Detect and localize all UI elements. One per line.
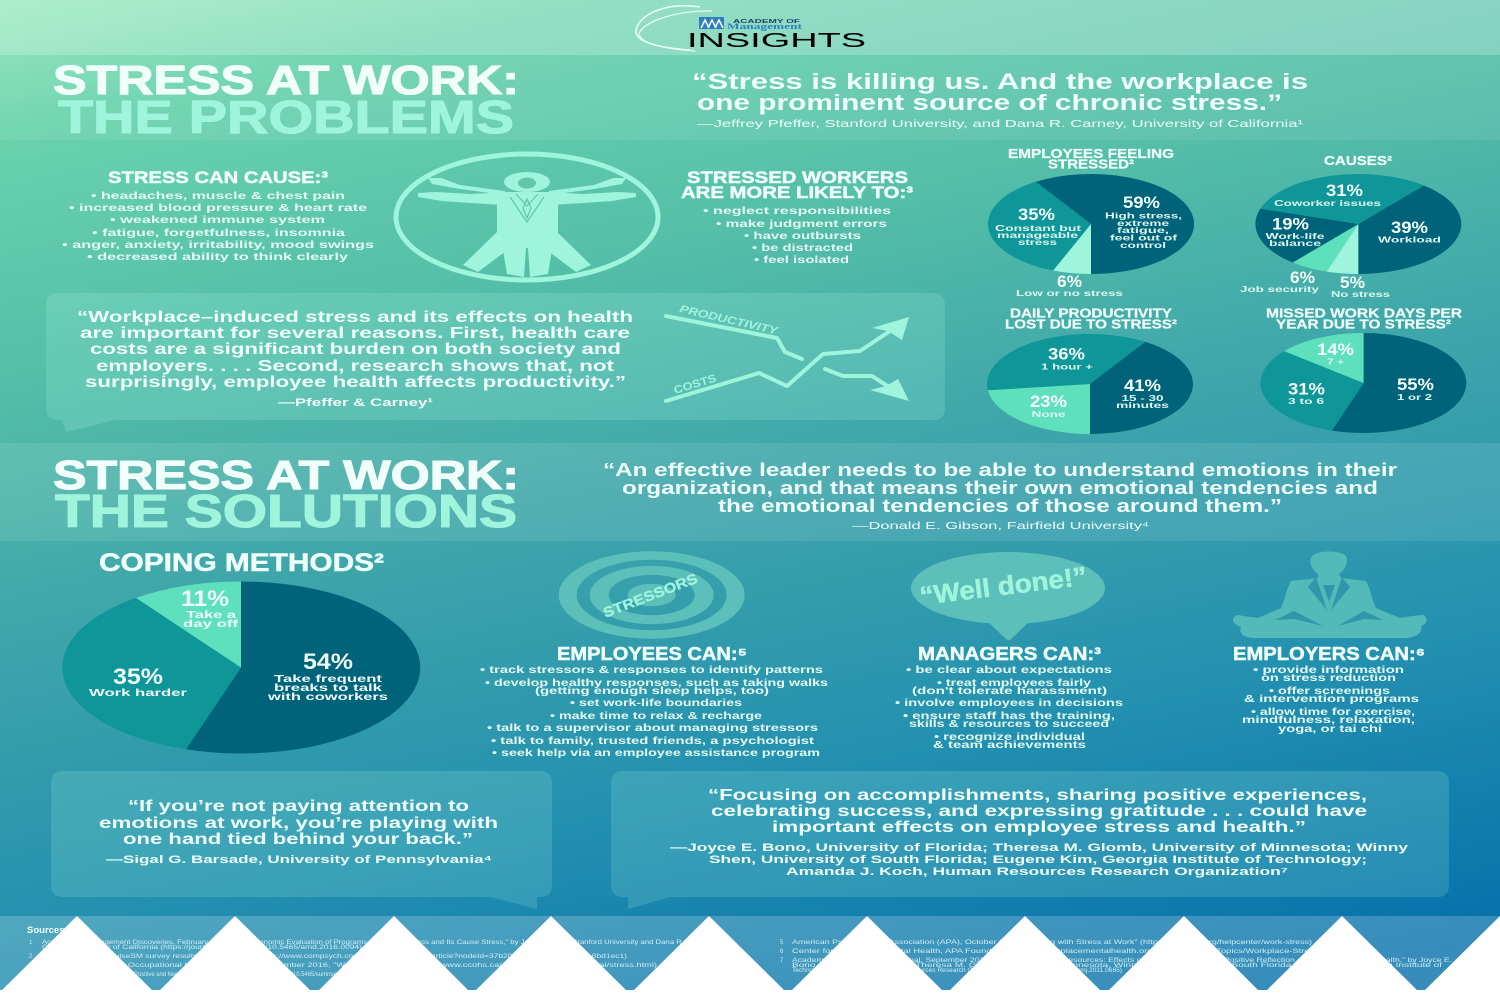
text block: employees can xyxy=(480,644,829,759)
panel: sources: Bono, University of Florida, Theresa M. Glomb, University of Minnesota, Winny Shen, University of South Florida, Eugene Kim, Georgia Institute of xyxy=(792,963,1443,969)
pie chart: employees feeling stressed: extreme xyxy=(1117,219,1170,228)
text block: managers can: & team achievements xyxy=(933,740,1087,751)
callout: workplace-induced stress quote: employers. . . . Second, research shows that, not xyxy=(96,358,615,375)
text block: managers can: • recognize individual xyxy=(934,732,1085,743)
text block: managers can: skills & resources to succeed xyxy=(909,719,1109,730)
callout: Bono et al. quote: important effects on employee stress and health.” xyxy=(772,819,1306,836)
pie chart: causes: No stress xyxy=(1331,290,1391,299)
pie chart: missed work days: MISSED WORK DAYS PER xyxy=(1266,306,1462,320)
pie chart: daily productivity lost xyxy=(987,306,1193,434)
heading: the solutions: STRESS AT WORK: xyxy=(53,452,519,498)
pie chart: daily productivity lost: None xyxy=(1032,410,1066,419)
pie chart: daily productivity lost: 23% xyxy=(1030,392,1067,411)
chart icon: productivity falling, costs rising xyxy=(666,303,909,401)
chart icon: productivity falling, costs rising: COSTS xyxy=(672,373,718,397)
quote: Gibson: “An effective leader needs to be able to understand emotions in their xyxy=(603,459,1397,480)
text block: managers can: • ensure staff has the training, xyxy=(903,711,1115,722)
panel: sources: Academy of Management Insights, Positive and Negative Emotions (https://journals.aom.org/doi/10.5465/summary) xyxy=(42,972,342,978)
callout: Barsade quote: “If you’re not paying attention to xyxy=(128,798,469,815)
panel: sources: Carney, University of California (https://journals.aom.org/doi/10.5465/amd.2016.0094) xyxy=(42,945,362,951)
pie chart: coping methods: Work harder xyxy=(89,688,187,699)
panel: sources: 1 xyxy=(29,940,33,946)
pie chart: daily productivity lost: 36% xyxy=(1048,344,1085,364)
pie chart: missed work days: 55% xyxy=(1397,375,1434,394)
text block: employees can: • develop healthy responses, such as taking walks xyxy=(485,678,829,689)
text block: stress can cause xyxy=(62,168,375,263)
pie chart: employees feeling stressed: 59% xyxy=(1123,193,1160,212)
pie chart: causes: 39% xyxy=(1391,218,1428,237)
pie chart: causes: CAUSES² xyxy=(1324,154,1392,168)
quote: Pfeffer and Carney: “Stress is killing us. And the workplace is xyxy=(692,69,1308,94)
quote: Gibson: organization, and that means their own emotional tendencies and xyxy=(622,477,1378,498)
chart icon: productivity falling, costs rising: PRODUCTIVITY xyxy=(678,303,780,338)
heading: the problems: THE PROBLEMS xyxy=(58,91,514,143)
icon: well done speech bubble xyxy=(911,552,1105,640)
text block: employers can: yoga, or tai chi xyxy=(1278,724,1382,735)
text block: managers can: • be clear about expectations xyxy=(906,665,1113,676)
pie chart: causes: balance xyxy=(1269,239,1322,248)
text block: employees can: • talk to family, trusted friends, a psychologist xyxy=(491,736,815,747)
icon: stressors target: STRESSORS xyxy=(601,570,700,621)
callout: Barsade quote: —Sigal G. Barsade, University of Pennsylvania⁴ xyxy=(106,854,492,866)
icon: stressors target xyxy=(568,556,736,634)
text block: managers can: MANAGERS CAN:³ xyxy=(918,644,1101,664)
text block: managers can: • treat employees fairly xyxy=(937,678,1092,689)
panel: sources: 7 xyxy=(780,958,784,964)
white sawtooth edge at the bottom xyxy=(0,916,1500,1000)
pie chart: coping methods xyxy=(62,549,420,753)
pie chart: employees feeling stressed: Constant but xyxy=(995,224,1082,233)
text block: stressed workers: • make judgment errors xyxy=(716,219,888,230)
pie chart: employees feeling stressed xyxy=(988,147,1194,298)
pie chart: causes: Coworker issues xyxy=(1274,199,1382,208)
pie chart: employees feeling stressed: fatigue, xyxy=(1117,226,1169,235)
heading: the problems: STRESS AT WORK: xyxy=(53,57,519,103)
heading: the solutions xyxy=(53,452,519,537)
pie chart: missed work days: 7 + xyxy=(1327,358,1344,366)
pie chart: employees feeling stressed: High stress, xyxy=(1105,212,1182,220)
pie chart: coping methods: day off xyxy=(183,619,239,630)
logo: Academy of Management Insights: ACADEMY OF xyxy=(733,19,800,25)
text block: employees can: • set work-life boundaries xyxy=(570,698,743,709)
pie chart: coping methods: 35% xyxy=(113,664,163,689)
text block: stressed workers: • neglect responsibilities xyxy=(703,206,892,217)
panel: sources: 6 xyxy=(780,949,784,955)
pie chart: causes: 19% xyxy=(1272,214,1309,234)
panel: sources: 4 xyxy=(29,972,33,978)
text block: employees can: • track stressors & responses to identify patterns xyxy=(480,665,824,676)
logo: Academy of Management Insights: INSIGHTS xyxy=(687,30,866,52)
text block: stressed workers: ARE MORE LIKELY TO:³ xyxy=(681,183,913,202)
text block: stressed workers: STRESSED WORKERS xyxy=(687,168,908,187)
panel: sources: American Psychological Association (APA), October 2018, "Coping with Stress at Work" (http://www.apa.org/helpcenter/work-stress) xyxy=(792,940,1312,946)
text block: employers can: • provide information xyxy=(1253,665,1404,676)
pie chart: coping methods: COPING METHODS² xyxy=(99,549,384,577)
callout: Barsade quote: emotions at work, you’re playing with xyxy=(99,815,498,832)
text block: stressed workers: • feel isolated xyxy=(754,255,849,266)
text block: stress can cause: • anger, anxiety, irritability, mood swings xyxy=(62,240,375,251)
text block: employers can: on stress reduction xyxy=(1261,673,1396,684)
text block: employees can: (getting enough sleep helps, too) xyxy=(535,686,769,697)
pie chart: employees feeling stressed: EMPLOYEES FEELING xyxy=(1008,147,1174,161)
callout: Barsade quote xyxy=(51,771,552,909)
heading: the solutions: THE SOLUTIONS xyxy=(55,485,517,537)
pie chart: employees feeling stressed: 35% xyxy=(1018,205,1055,224)
panel: sources: Canadian Centre for Occupational Health and Safety, December 2016, "Workplace Stress" (http://www.ccohs.ca/oshanswers/psychosocial/stress.html) xyxy=(42,963,657,969)
quote: Gibson: the emotional tendencies of those around them.” xyxy=(718,495,1282,516)
callout: Bono et al. quote: Shen, University of South Florida; Eugene Kim, Georgia Institute of Technology; xyxy=(709,854,1367,866)
text block: employees can: EMPLOYEES CAN:⁵ xyxy=(557,644,747,664)
pie chart: coping methods: 11% xyxy=(181,586,229,611)
quote: Pfeffer and Carney: one prominent source of chronic stress.” xyxy=(697,90,1282,115)
logo: Academy of Management Insights: Management xyxy=(727,22,803,31)
text block: employers can: • offer screenings xyxy=(1269,686,1391,697)
callout: workplace-induced stress quote: surprisingly, employee health affects productivity.” xyxy=(85,374,626,391)
text block: employees can: • make time to relax & recharge xyxy=(550,711,763,722)
callout: Bono et al. quote xyxy=(611,771,1449,909)
text block: employers can: mindfulness, relaxation, xyxy=(1242,715,1415,726)
pie chart: causes: Workload xyxy=(1378,236,1441,244)
pie chart: employees feeling stressed: 6% xyxy=(1057,272,1082,291)
pie chart: daily productivity lost: DAILY PRODUCTIVITY xyxy=(1010,306,1173,320)
panel: sources: Academy of Management Discoveries, February 2018, "The Economic Evaluation of Programs to Reduce Stress and Its Cause Stress," by Jeffrey Pfeffer, Stanford University and Dana R. xyxy=(42,940,684,946)
text block: stressed workers: • have outbursts xyxy=(744,231,862,242)
pie chart: daily productivity lost: 1 hour + xyxy=(1041,362,1094,372)
text block: employers can: & intervention programs xyxy=(1244,694,1420,705)
callout: Bono et al. quote: Amanda J. Koch, Human Resources Research Organization⁷ xyxy=(786,866,1289,878)
text block: stress can cause: • decreased ability to think clearly xyxy=(87,252,349,263)
pie chart: missed work days: 14% xyxy=(1317,340,1354,359)
pie chart: daily productivity lost: 41% xyxy=(1124,376,1161,395)
pie chart: daily productivity lost: LOST DUE TO STRESS² xyxy=(1005,318,1177,332)
text block: managers can: (don't tolerate harassment) xyxy=(912,686,1107,697)
panel: sources: Center for Workplace Mental Health, APA Foundation (http://workplacementalhealth.org/Mental-Health-Topics/Workplace-Stress) xyxy=(792,949,1322,955)
pie chart: employees feeling stressed: control xyxy=(1120,241,1166,250)
pie chart: missed work days: 1 or 2 xyxy=(1397,393,1433,402)
pie chart: coping methods: Take frequent xyxy=(274,674,383,685)
text block: managers can xyxy=(895,644,1124,751)
pie chart: causes: Work-life xyxy=(1266,232,1325,241)
text block: employers can: • allow time for exercise, xyxy=(1251,707,1415,718)
pie chart: coping methods: 54% xyxy=(303,649,353,674)
callout: workplace-induced stress quote: “Workplace–induced stress and its effects on health xyxy=(77,309,633,326)
text block: stress can cause: • headaches, muscle & chest pain xyxy=(91,191,345,202)
panel: sources: 5 xyxy=(780,940,784,946)
callout: Bono et al. quote: celebrating success, and expressing gratitude . . . could have xyxy=(711,803,1367,820)
callout: workplace-induced stress quote: —Pfeffer & Carney¹ xyxy=(278,397,434,409)
pie chart: causes xyxy=(1240,154,1461,299)
logo: Academy of Management Insights xyxy=(636,6,866,52)
callout: workplace-induced stress quote xyxy=(46,293,945,432)
text block: employees can: • talk to a supervisor about managing stressors xyxy=(487,723,819,734)
panel: sources: Sources xyxy=(27,925,64,936)
panel: sources xyxy=(0,916,1500,1000)
callout: Bono et al. quote: “Focusing on accomplishments, sharing positive experiences, xyxy=(708,787,1367,804)
pie chart: missed work days: YEAR DUE TO STRESS² xyxy=(1276,318,1451,332)
icon: well done speech bubble: “Well done!” xyxy=(918,561,1088,611)
text block: employers can xyxy=(1233,644,1425,735)
text block: employees can: • seek help via an employee assistance program xyxy=(492,748,820,759)
panel: sources: Technology; Amanda J. Koch, Human Resources Research Organization (https://doi.org/10.5465/amj.2011.0665) xyxy=(792,968,1122,974)
text block: employers can: EMPLOYERS CAN:⁶ xyxy=(1233,644,1425,664)
text block: stressed workers: • be distracted xyxy=(752,243,853,254)
pie chart: employees feeling stressed: manageable xyxy=(997,231,1079,240)
callout: workplace-induced stress quote: costs are a significant burden on both society and xyxy=(90,341,621,358)
text block: stress can cause: • fatigue, forgetfulness, insomnia xyxy=(92,228,346,239)
panel: sources: ComPsych StressPulseSM survey results, October 2017 (https://www.compsych.com/press-room/press-article?nodeId=37b20f13-6b07-4e2a-9d2e-8bd1ec1) xyxy=(42,954,627,960)
pie chart: causes: 5% xyxy=(1340,273,1365,292)
callout: workplace-induced stress quote: are important for several reasons. First, health care xyxy=(80,325,630,342)
pie chart: coping methods: with coworkers xyxy=(266,692,389,703)
pie chart: missed work days: 31% xyxy=(1288,380,1325,398)
pie chart: causes: 6% xyxy=(1290,268,1315,287)
quote: Gibson xyxy=(603,459,1397,532)
icon: meditating employer xyxy=(1233,552,1427,638)
pie chart: coping methods: breaks to talk xyxy=(274,683,383,694)
text block: managers can: • involve employees in decisions xyxy=(895,698,1124,709)
quote: Pfeffer and Carney xyxy=(692,69,1308,130)
panel: sources: Academy of Management Journal, September 2013, "Building Positive Resources: Effects of Positive Events and Positive Reflection on Work Stress and Health," by Joyce E. xyxy=(792,958,1452,964)
pie chart: causes: Job security xyxy=(1240,285,1320,294)
text block: stress can cause: • weakened immune system xyxy=(110,215,325,226)
callout: Barsade quote: one hand tied behind your back.” xyxy=(123,831,473,848)
text block: stress can cause: STRESS CAN CAUSE:³ xyxy=(108,168,328,187)
pie chart: daily productivity lost: minutes xyxy=(1116,401,1170,410)
pie chart: employees feeling stressed: feel out of xyxy=(1110,234,1178,242)
text block: stress can cause: • increased blood pressure & heart rate xyxy=(69,203,368,214)
panel: sources: 3 xyxy=(29,963,33,969)
pie chart: missed work days xyxy=(1260,306,1466,433)
pie chart: coping methods: Take a xyxy=(186,610,237,621)
quote: Gibson: —Donald E. Gibson, Fairfield University⁴ xyxy=(852,520,1149,532)
text block: stressed workers xyxy=(681,168,913,266)
pie chart: employees feeling stressed: stress xyxy=(1018,238,1058,247)
pie chart: employees feeling stressed: Low or no stress xyxy=(1016,289,1124,298)
panel: sources: 2 xyxy=(29,954,33,960)
icon: Vitruvian businessman xyxy=(396,154,658,280)
pie chart: missed work days: 3 to 6 xyxy=(1288,397,1325,406)
pie chart: causes: 31% xyxy=(1326,181,1363,200)
pie chart: employees feeling stressed: STRESSED² xyxy=(1048,158,1134,172)
quote: Pfeffer and Carney: —Jeffrey Pfeffer, Stanford University, and Dana R. Carney, University of California¹ xyxy=(697,118,1304,130)
pie chart: daily productivity lost: 15 - 30 xyxy=(1122,394,1164,403)
heading: the problems xyxy=(53,57,519,143)
callout: Bono et al. quote: —Joyce E. Bono, University of Florida; Theresa M. Glomb, University of Minnesota; Winny xyxy=(670,842,1409,854)
